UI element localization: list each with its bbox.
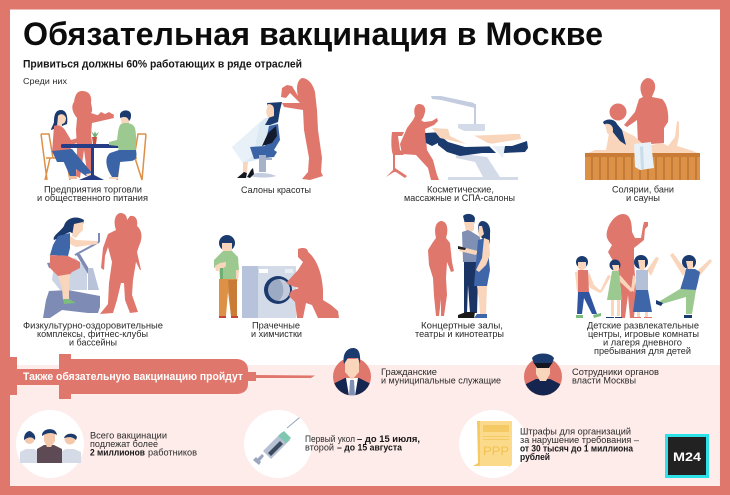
text: government officers [572, 367, 659, 386]
icon: silhouette of woman [607, 214, 648, 318]
icon: civil servant [333, 348, 371, 396]
text: caption cosmetic salons [404, 184, 515, 203]
text: caption fitness: Физкультурно-оздоровительные [23, 320, 163, 330]
icon: beautician silhouette [400, 104, 439, 180]
icon: man in vest [458, 214, 480, 318]
icon: syringe [253, 418, 301, 465]
text: among them: Среди них [23, 76, 68, 86]
logo: M24: М24 [673, 450, 701, 464]
text: government officers: власти Москвы [572, 376, 636, 386]
icon: woman at table [51, 110, 98, 179]
icon: man silhouette with fan [610, 78, 668, 145]
icon: sauna bench [585, 153, 700, 180]
text: caption trade and catering [37, 184, 148, 203]
icon: tray [97, 112, 114, 119]
stat: two million workers [16, 410, 197, 478]
icon: kneeling man silhouette [286, 248, 339, 318]
title: Обязательная вакцинация в Москве [23, 16, 603, 52]
icon: document with PPP: PPP [483, 444, 509, 458]
icon: treatment chair [438, 134, 528, 180]
text: fines: от 30 тысяч до 1 миллиона [520, 444, 634, 454]
panel: solariums, baths and saunas [585, 78, 700, 180]
text: civil servants: Гражданские [381, 367, 437, 377]
icon: woman silhouette [428, 221, 454, 316]
text: government officers: Сотрудники органов [572, 367, 659, 377]
text: caption concert halls [415, 320, 504, 339]
text: caption laundries [251, 320, 302, 339]
text: two million workers: подлежат более [90, 439, 158, 449]
text: vaccination dates: – до 15 июля, [357, 434, 420, 444]
icon: reclining woman [588, 120, 698, 170]
text: caption saunas: Солярии, бани [612, 184, 674, 194]
text: caption trade and catering: и общественного питания [37, 193, 148, 203]
icon: government officer [524, 354, 562, 396]
panel: children's centres [575, 214, 712, 318]
text: caption concert halls: Концертные залы, [421, 320, 503, 330]
icon: man at table [106, 110, 136, 179]
text: caption cosmetic salons: Косметические, [427, 184, 494, 194]
text: vaccination dates [305, 434, 420, 452]
text: two million workers: Всего вакцинации [90, 430, 167, 440]
icon: boy [214, 235, 239, 318]
stat: fines [459, 410, 639, 478]
text: caption children's centres: центры, игровые комнаты [588, 329, 699, 339]
text: caption children's centres: и лагеря дневного [603, 338, 682, 348]
subtitle: Привиться должны 60% работающих в ряде отраслей [23, 58, 302, 70]
icon: table and plant [61, 131, 127, 180]
panel: fitness [43, 213, 141, 318]
text: caption laundries: и химчистки [251, 329, 302, 339]
text: vaccination dates: – до 15 августа [337, 442, 403, 452]
icon: hairdresser silhouette [281, 78, 323, 180]
text: caption concert halls: театры и кинотеатры [415, 329, 504, 339]
panel: cosmetic and massage salons [386, 96, 528, 180]
panel: laundries [214, 235, 339, 318]
text: caption beauty salons: Салоны красоты [241, 185, 311, 195]
icon: kid four [656, 253, 712, 318]
banner: syringe [10, 354, 315, 399]
text: vaccination dates: второй [305, 442, 334, 452]
icon: kid one [575, 256, 602, 318]
text: caption laundries: Прачечные [252, 320, 300, 330]
text: caption children's centres: Детские развлекательные [587, 320, 699, 330]
text: caption saunas: и сауны [626, 193, 660, 203]
text: caption fitness: и бассейны [69, 338, 117, 348]
text: caption saunas [612, 184, 674, 203]
icon: group of workers [20, 429, 81, 463]
icon: reclining client [425, 128, 521, 158]
text: caption children's centres: пребывания для детей [594, 346, 691, 356]
panel: concert halls and theatres [428, 214, 490, 318]
icon: chairs [41, 134, 146, 180]
text: fines: Штрафы для организаций [520, 426, 631, 436]
text: civil servants: и муниципальные служащие [381, 376, 501, 386]
icon: client in chair [232, 102, 282, 178]
text: caption children's centres [587, 320, 699, 356]
text: two million workers [90, 430, 197, 458]
icon: document with PPP [473, 421, 512, 466]
text: banner heading: Также обязательную вакцинацию пройдут [23, 371, 244, 383]
icon: waitress silhouette [72, 91, 114, 179]
text: caption fitness [23, 320, 163, 348]
panel: lower pink section [10, 365, 720, 486]
icon: stool [386, 132, 407, 178]
logo: M24 [666, 436, 708, 476]
text: civil servants [381, 367, 501, 386]
icon: washing machine [242, 266, 296, 318]
icon: kid three [631, 255, 659, 318]
icon: kid two [600, 260, 633, 318]
icon: exercise bike [43, 233, 100, 318]
text: two million workers: 2 миллионов [90, 448, 145, 458]
text: fines: рублей [520, 452, 550, 462]
text: caption cosmetic salons: массажные и СПА-салоны [404, 193, 515, 203]
text: caption trade and catering: Предприятия торговли [44, 184, 142, 194]
text: two million workers: работников [148, 448, 197, 458]
icon: woman in dress [474, 221, 490, 318]
text: fines [520, 426, 639, 462]
panel: beauty salons [232, 78, 323, 180]
text: caption fitness: комплексы, фитнес-клубы [37, 329, 148, 339]
icon: silhouette with long hair [100, 213, 141, 314]
panel: trade and catering [41, 91, 146, 180]
text: vaccination dates: Первый укол [305, 434, 355, 444]
icon: cycling woman [50, 218, 98, 304]
icon: lamp [431, 96, 485, 131]
text: fines: за нарушение требования – [520, 435, 639, 445]
stat: vaccination dates [244, 410, 420, 478]
